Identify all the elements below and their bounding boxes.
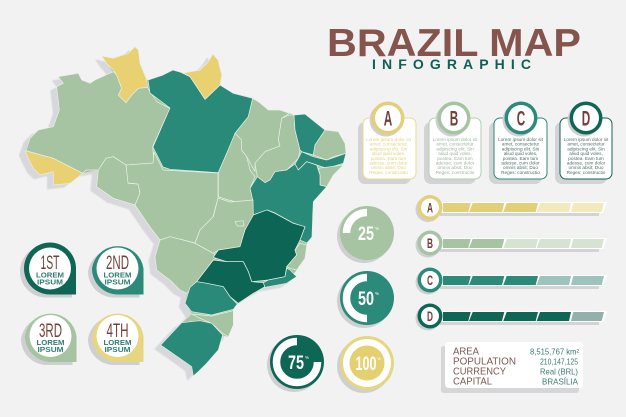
card A: postea. Eam tum (371, 156, 406, 161)
progress bar C (416, 268, 607, 294)
percent dial 25: % (375, 226, 379, 231)
state: Goias (195, 198, 253, 253)
country facts box: AREA (453, 346, 479, 358)
state: Bahia (250, 162, 327, 243)
percent dial 50: % (375, 291, 379, 296)
percent dial 100: 100 (356, 354, 376, 375)
state: Piaui (255, 115, 300, 183)
ranking badge 4TH: 4TH (106, 321, 128, 342)
state: Amazonas (26, 72, 170, 173)
state: Roraima (102, 47, 147, 103)
percent dial 75 (267, 335, 324, 392)
card C: Reges: constructio (501, 170, 540, 175)
card B: omnis absit; Duo (438, 165, 473, 170)
state: Acre (25, 151, 83, 185)
card A (358, 102, 416, 184)
subtitle: INFOGRAPHIC (372, 56, 531, 72)
percent dial 50 (337, 271, 394, 328)
progress bar B (416, 230, 607, 258)
card A: Lorem ipsum dolor sit (366, 137, 412, 142)
card C: omnis absit; Duo (503, 165, 538, 170)
ranking badge 1ST (20, 242, 76, 298)
percent dial 100 (337, 336, 394, 393)
state: Ceara (294, 114, 325, 155)
state: Alagoas and Sergipe (318, 165, 343, 187)
country facts box: CAPITAL (453, 376, 492, 388)
state: Sao Paulo (197, 260, 265, 303)
card D: Reges: constructio (567, 170, 606, 175)
country facts box: BRASÍLIA (542, 376, 578, 386)
card D: postea. Eam tum (568, 156, 604, 161)
card B: Reges: constructio (436, 170, 475, 175)
card C: aliud quid voles, (504, 151, 537, 156)
country facts box (441, 342, 583, 393)
ranking badge 3RD: 3RD (39, 321, 62, 342)
state: Amapa (183, 54, 222, 99)
country facts box: Real (BRL) (540, 366, 578, 376)
card B: adipiscing elit. Sin (436, 146, 474, 151)
card D (555, 102, 612, 184)
percent dial 75: 75 (288, 353, 304, 374)
ranking badge 3RD (21, 314, 76, 365)
ranking badge 3RD: LOREM (36, 338, 64, 347)
card D: adesse, cum dolor (567, 160, 606, 166)
card A: adesse, cum dolor (369, 160, 408, 166)
card A: Reges: constructio (369, 170, 408, 175)
card C: adipiscing elit. Sin (502, 146, 540, 151)
ranking badge 4TH: IPSUM (104, 345, 130, 354)
state: Santa Catarina (192, 311, 233, 337)
card B (424, 102, 481, 184)
state: Tocantins (218, 133, 255, 203)
card B: amet, consectetur (436, 142, 474, 147)
card C: adesse, cum dolor (501, 160, 540, 166)
progress bar A (416, 195, 607, 222)
card D: aliud quid voles, (569, 151, 603, 156)
ranking badge 1ST: 1ST (40, 253, 60, 274)
state: Para (148, 70, 253, 173)
card D: D (582, 108, 590, 130)
title: BRAZIL MAP (327, 22, 581, 65)
state: Mato Grosso do Sul (155, 237, 218, 293)
card D: amet, consectetur (567, 142, 605, 147)
percent dial 50: 50 (358, 289, 374, 310)
card A: aliud quid voles, (372, 151, 405, 156)
state: Rio de Janeiro (263, 268, 297, 287)
country facts box: 8,515,767 km² (530, 346, 579, 356)
card C: amet, consectetur (502, 142, 540, 147)
ranking badge 2ND: LOREM (104, 270, 132, 280)
country facts box: 210,147,125 (540, 356, 578, 366)
ranking badge 2ND: 2ND (106, 253, 129, 274)
card C: postea. Eam tum (503, 156, 538, 161)
country facts box: CURRENCY (453, 366, 506, 378)
ranking badge 4TH: LOREM (104, 338, 132, 347)
map of Brazil (25, 47, 346, 376)
state: Maranhao (235, 98, 289, 172)
state: Parana (185, 282, 237, 315)
percent dial 25 (337, 206, 394, 263)
card B: adesse, cum dolor (436, 160, 475, 166)
card B: B (450, 108, 458, 130)
state: Rio Grande do Sul (161, 321, 223, 376)
progress bar A: A (427, 200, 433, 216)
card D: adipiscing elit. Sin (567, 146, 605, 151)
country silhouette (25, 47, 346, 376)
state: Espirito Santo (287, 243, 307, 270)
state: Rondonia (97, 157, 140, 205)
card B: Lorem ipsum dolor sit (433, 137, 478, 142)
ranking badge 2ND: IPSUM (104, 278, 130, 286)
card A: A (384, 108, 392, 130)
progress bar D: D (427, 308, 433, 324)
progress bar B: B (427, 235, 433, 251)
card C: Lorem ipsum dolor sit (498, 137, 544, 142)
card C (489, 102, 547, 184)
percent dial 25: 25 (358, 224, 374, 245)
country facts box: POPULATION (453, 356, 516, 368)
card A: adipiscing elit. Sin (370, 146, 408, 151)
progress bar D (416, 304, 607, 330)
ranking badge 2ND (88, 246, 144, 298)
state: Rio Grande do Norte and Paraiba (313, 130, 346, 160)
card A: amet, consectetur (370, 142, 408, 147)
state: Federal District (235, 221, 244, 226)
state: Mato Grosso (126, 152, 218, 243)
card C: C (517, 108, 525, 130)
percent dial 75: % (305, 355, 309, 360)
card B: aliud quid voles, (438, 151, 472, 156)
card B: postea. Eam tum (437, 156, 473, 161)
card A: omnis absit; Duo (371, 165, 406, 170)
progress bar C: C (427, 272, 433, 288)
ranking badge 3RD: IPSUM (38, 345, 64, 354)
card D: Lorem ipsum dolor sit (564, 137, 609, 142)
percent dial 100: % (377, 356, 381, 361)
ranking badge 1ST: LOREM (36, 270, 64, 280)
ranking badge 1ST: IPSUM (37, 278, 63, 286)
ranking badge 4TH (88, 314, 144, 365)
state: Pernambuco (295, 152, 346, 170)
card D: omnis absit; Duo (569, 165, 604, 170)
state: Minas Gerais (213, 210, 305, 282)
